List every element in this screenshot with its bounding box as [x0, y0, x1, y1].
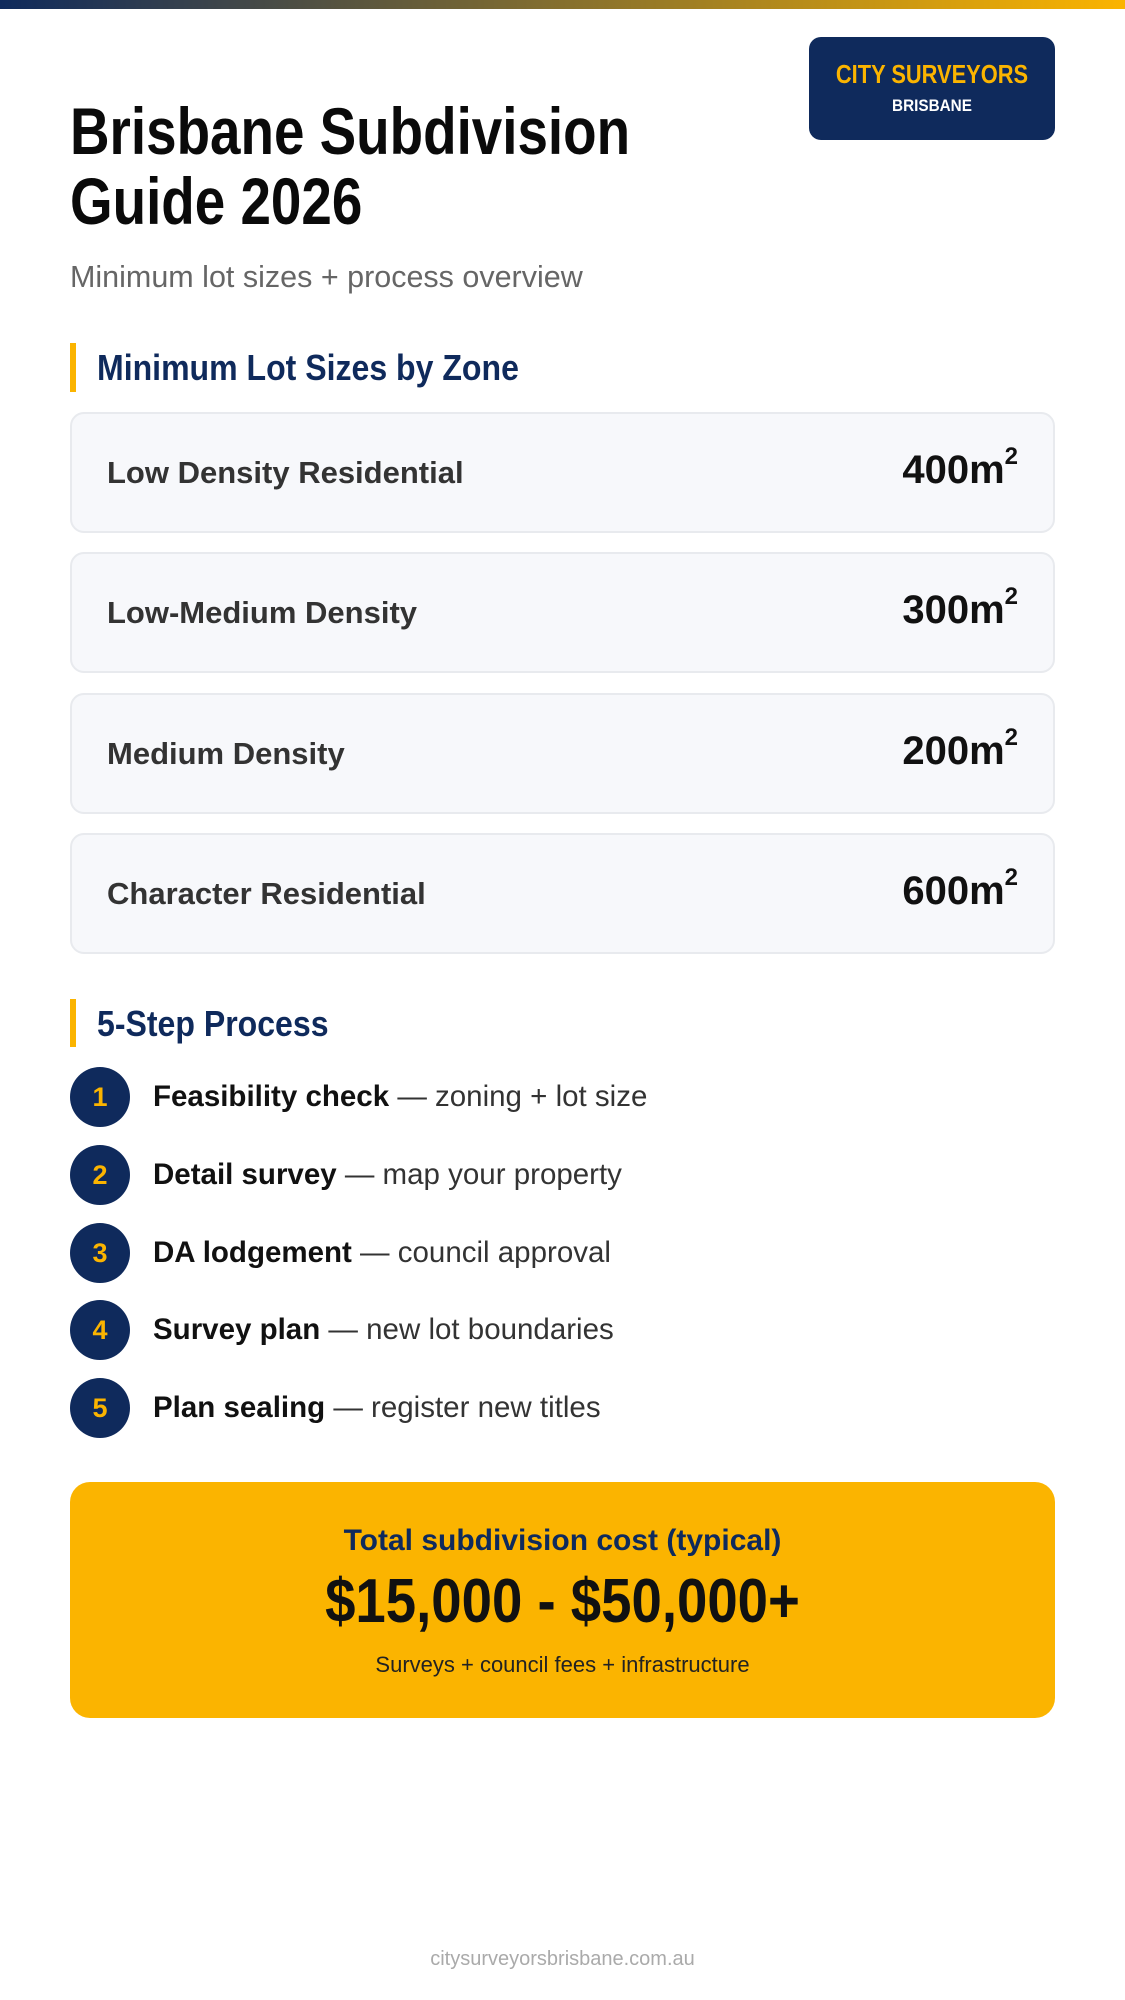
card: character [70, 833, 1055, 954]
step 4 [70, 1300, 614, 1360]
step 3: DA lodgement — council approval [153, 1236, 611, 1269]
step 4: Survey plan — new lot boundaries [153, 1313, 614, 1346]
heading: process: 5-Step Process [97, 1003, 329, 1044]
logo badge: CITY SURVEYORS [836, 59, 1028, 89]
step 3 [70, 1223, 611, 1283]
footer: citysurveyorsbrisbane.com.au [430, 1948, 695, 1970]
step 2 [70, 1145, 622, 1205]
top gradient bar [0, 0, 1125, 9]
step 3: 3 [92, 1238, 108, 1268]
logo badge: BRISBANE [892, 96, 972, 115]
step 1: 1 [92, 1082, 108, 1112]
subtitle: Minimum lot sizes + process overview [70, 260, 583, 294]
step 2: 2 [92, 1160, 108, 1190]
step 5 [70, 1378, 601, 1438]
card: medium: Medium Density [107, 736, 345, 771]
step 5: Plan sealing — register new titles [153, 1391, 601, 1424]
cost callout: Total subdivision cost (typical) [344, 1524, 781, 1557]
title [70, 94, 630, 238]
card: character: 600m2 [902, 864, 1018, 913]
title: Brisbane Subdivision [70, 94, 630, 168]
card: low-medium: Low-Medium Density [107, 595, 417, 630]
cost callout: $15,000 - $50,000+ [325, 1567, 800, 1636]
card: medium [70, 693, 1055, 814]
card: medium: 200m2 [902, 724, 1018, 773]
step 1: Feasibility check — zoning + lot size [153, 1080, 647, 1113]
step 2: Detail survey — map your property [153, 1158, 622, 1191]
step 1 [70, 1067, 647, 1127]
card: low density: 400m2 [902, 443, 1018, 492]
logo badge [809, 37, 1055, 140]
title: Guide 2026 [70, 164, 362, 238]
step 4: 4 [92, 1315, 108, 1345]
step 5: 5 [92, 1393, 108, 1423]
card: low density: Low Density Residential [107, 455, 464, 490]
cost callout [70, 1482, 1055, 1718]
card: low density [70, 412, 1055, 533]
heading: lot sizes: Minimum Lot Sizes by Zone [97, 347, 519, 388]
card: low-medium [70, 552, 1055, 673]
cost callout: Surveys + council fees + infrastructure [375, 1652, 750, 1677]
card: low-medium: 300m2 [902, 583, 1018, 632]
card: character: Character Residential [107, 876, 426, 911]
